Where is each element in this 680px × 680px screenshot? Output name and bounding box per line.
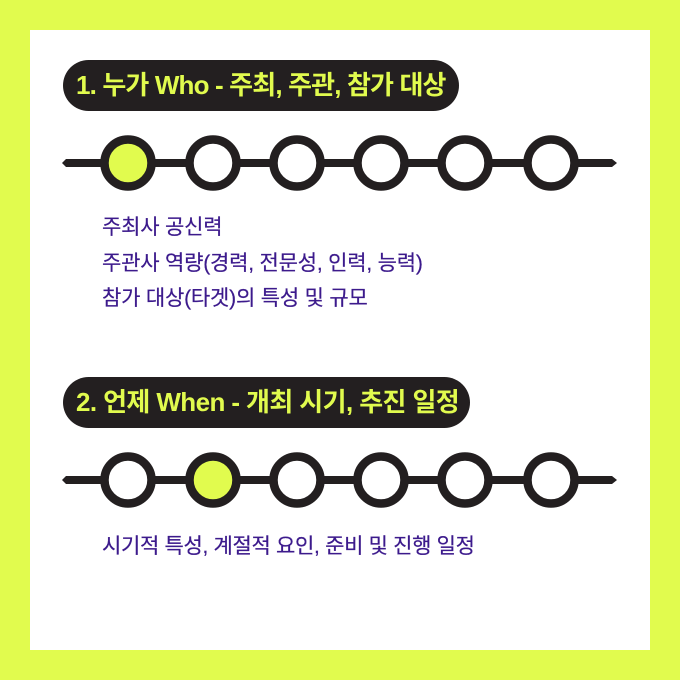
text block: section 1 details: 주최사 공신력 (102, 216, 222, 239)
heading: section 1 who: 1. 누가 Who - 주최, 주관, 참가 대상 (76, 70, 446, 100)
text block: section 1 details (102, 216, 423, 310)
heading: section 2 when: 2. 언제 When - 개최 시기, 추진 일정 (76, 387, 459, 417)
timeline: section 1 with first step active (62, 135, 617, 191)
timeline: section 2 with second step active (62, 452, 617, 508)
heading: section 2 when (63, 377, 470, 428)
heading: section 1 who (63, 60, 459, 111)
text block: section 1 details: 참가 대상(타겟)의 특성 및 규모 (102, 287, 368, 310)
text block: section 2 details: 시기적 특성, 계절적 요인, 준비 및 진행 일정 (102, 535, 475, 558)
text block: section 1 details: 주관사 역량(경력, 전문성, 인력, 능력) (102, 252, 423, 274)
